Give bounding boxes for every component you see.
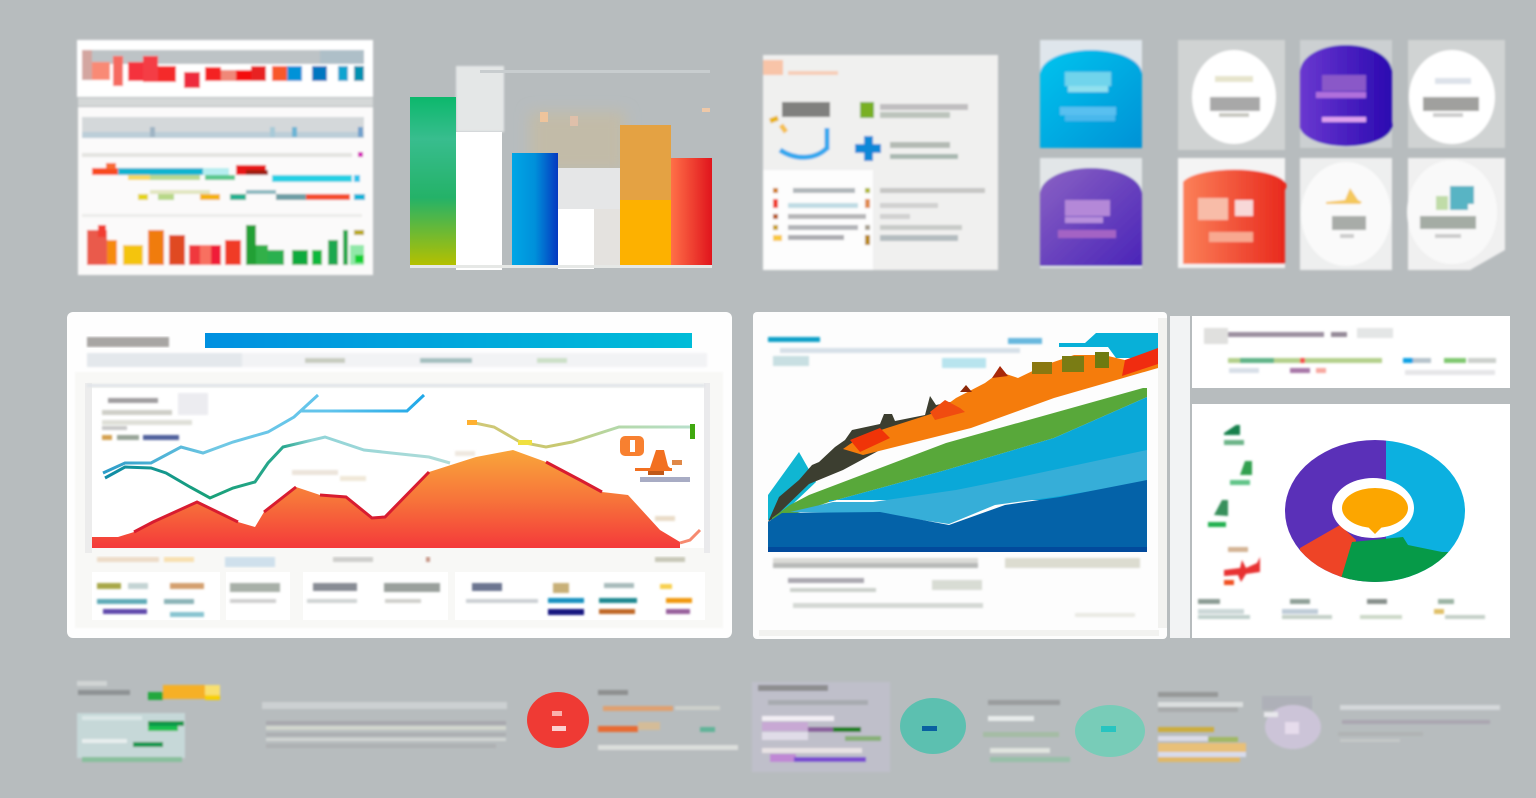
bottom strip: teal circle one — [900, 698, 966, 754]
header strip chart — [82, 50, 364, 88]
teal line — [105, 437, 450, 498]
panel: main line and area chart — [67, 312, 732, 638]
chart caption rows — [773, 558, 1140, 617]
top right blue wedge — [1059, 333, 1158, 358]
icon tile: violet badge — [1300, 40, 1392, 148]
panel: right top legend — [1170, 316, 1510, 638]
icon tile: white badge four — [1407, 158, 1505, 270]
cyan triangle — [768, 452, 816, 520]
bottom strip: teal circle two — [1075, 705, 1145, 757]
red ridge line — [134, 462, 602, 532]
annotation labels — [292, 451, 675, 521]
bottom strip: teal stat text — [983, 700, 1070, 762]
dark jagged edge — [768, 396, 960, 522]
bottom strip: lilac icon — [1262, 696, 1321, 749]
orange band — [843, 348, 1158, 455]
red bar — [671, 158, 712, 265]
column chart — [87, 225, 364, 265]
icon tile: white badge one — [1178, 40, 1285, 150]
chart heading bits — [768, 337, 1042, 368]
bottom strip: yellow stat card — [1158, 692, 1246, 762]
left pictograms — [1208, 425, 1260, 585]
header bar — [205, 333, 692, 348]
gantt strips — [82, 163, 365, 217]
bottom strip: stat card green — [77, 681, 220, 762]
bottom strip: paragraph — [262, 702, 507, 748]
orange band red accents — [850, 348, 1158, 452]
orange bar — [620, 125, 671, 265]
plus icon — [855, 136, 881, 161]
blue bar — [512, 153, 558, 265]
white bar — [456, 132, 502, 270]
icon tile: white badge three — [1300, 158, 1392, 270]
green band — [772, 388, 1147, 522]
cyan band — [829, 397, 1147, 502]
main title — [87, 337, 169, 347]
icon tile: white badge two — [1408, 40, 1505, 148]
panel: donut chart — [1192, 404, 1510, 638]
bottom strip: red stat bars — [598, 690, 738, 750]
panel: stacked strips card — [77, 40, 373, 275]
ring icon — [770, 118, 827, 157]
area chart — [92, 450, 680, 548]
orange arrow icons — [620, 436, 690, 482]
header sub strip — [87, 353, 707, 387]
bottom strip: red circle icon — [527, 692, 589, 748]
bottom strip: right paragraph — [1338, 705, 1500, 742]
legend rows — [773, 188, 985, 245]
metric cards — [92, 572, 705, 620]
chart legend — [102, 393, 208, 440]
pale and white bar — [558, 168, 620, 269]
light blue band — [790, 450, 1147, 524]
icon tile: blue — [1040, 40, 1142, 148]
table strip — [82, 117, 364, 157]
bottom strip: purple stat card — [752, 682, 890, 772]
panel: top bar chart — [410, 66, 712, 270]
axis labels — [97, 557, 685, 567]
deep blue band — [768, 480, 1147, 548]
olive green line — [470, 422, 693, 447]
panel: top legend card — [763, 55, 998, 270]
icon tile: red — [1178, 158, 1287, 268]
green bar — [410, 97, 456, 265]
donut — [1285, 440, 1466, 582]
bottom legend — [1198, 599, 1485, 619]
light blue line — [103, 395, 424, 473]
icon tile: purple — [1040, 158, 1142, 268]
panel: stacked area chart — [753, 312, 1167, 639]
